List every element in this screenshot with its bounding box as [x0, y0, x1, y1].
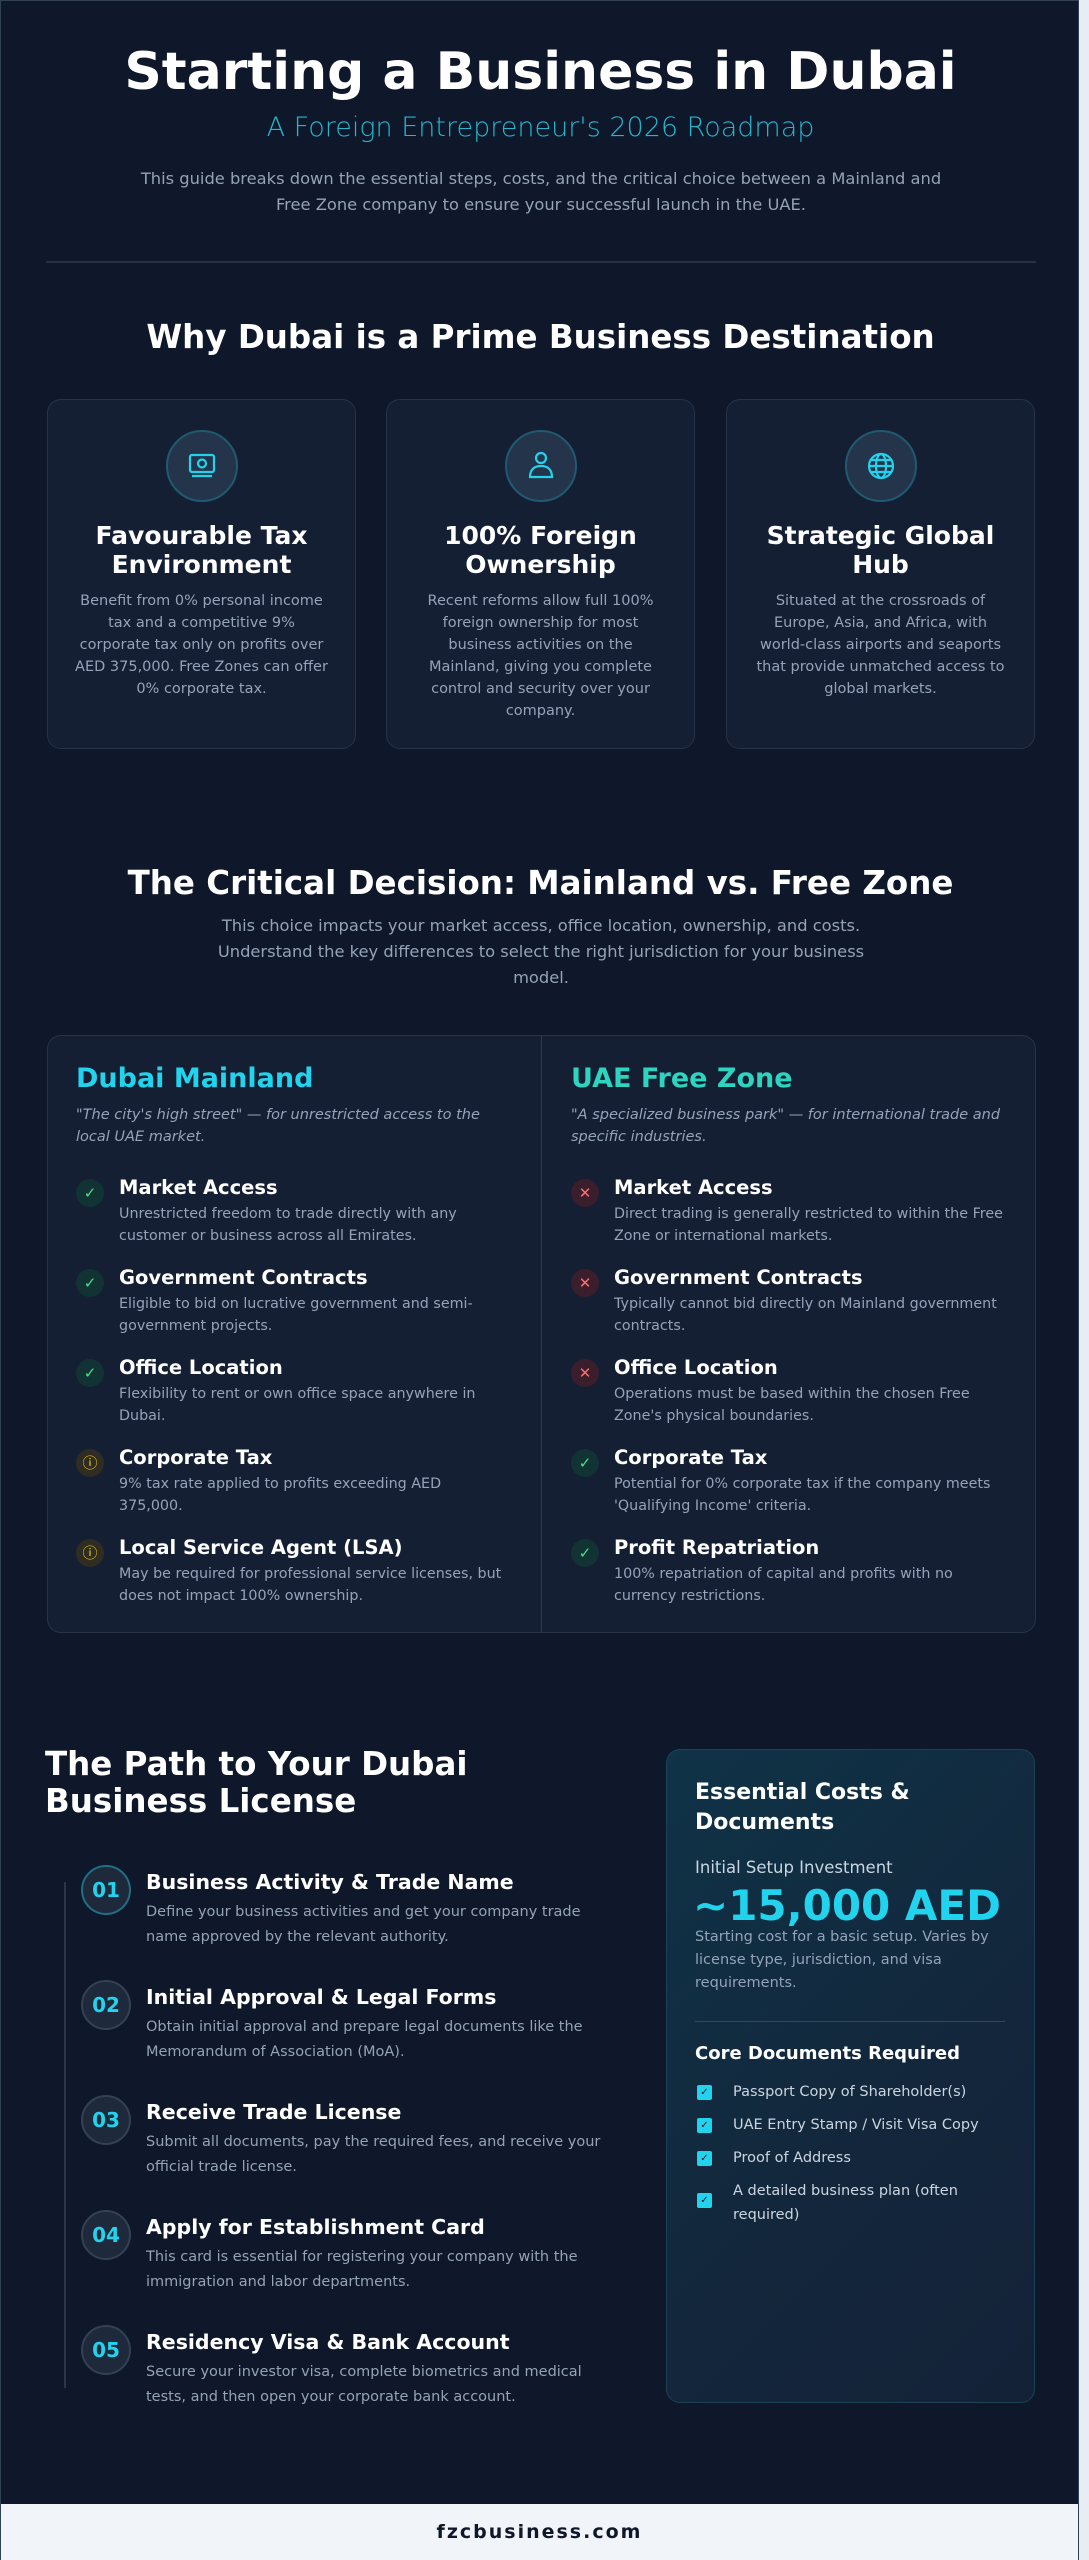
card title [96, 521, 308, 579]
item [571, 1446, 990, 1514]
doc list: ✓ [700, 2120, 709, 2131]
icon: globe [845, 430, 917, 502]
section intro: This choice impacts your market access, office location, ownership, and costs. Understand the key differences to select the right jurisdiction for your business model. [218, 916, 864, 987]
doc list: ✓ [700, 2195, 709, 2206]
column: mainland: ✓ [84, 1184, 96, 1202]
column: free zone: Operations must be based within the chosen Free Zone's physical boundaries. [614, 1386, 970, 1424]
card title: 100% Foreign [444, 521, 637, 550]
column: free zone: Government Contracts [614, 1266, 863, 1289]
card title: Favourable Tax [96, 521, 307, 550]
item [571, 1356, 970, 1424]
heading: path: The Path to Your Dubai [45, 1745, 468, 1783]
doc list: ✓ [700, 2087, 709, 2098]
item [571, 1176, 1003, 1244]
doc list: UAE Entry Stamp / Visit Visa Copy [733, 2117, 979, 2133]
text: Submit all documents, pay the required fees, and receive your official trade license. [146, 2134, 600, 2175]
text: Business Activity & Trade Name [146, 1870, 514, 1894]
column: free zone: ✓ [579, 1454, 591, 1472]
column: mainland: ✓ [84, 1364, 96, 1382]
doc list: Proof of Address [733, 2150, 851, 2166]
step 5: 05 [92, 2338, 120, 2362]
text: Receive Trade License [146, 2100, 401, 2124]
column: free zone: Profit Repatriation [614, 1536, 819, 1559]
card text: Recent reforms allow full 100% foreign ownership for most business activities on the Mainland, giving you complete control and security over your company. [428, 593, 653, 719]
column: mainland: 375,000. [119, 1498, 183, 1514]
card title [444, 521, 637, 579]
heading: path: Business License [45, 1782, 356, 1820]
column: mainland: May be required for professional service licenses, but does not impact 100% ownership. [119, 1566, 501, 1604]
doc list: ✓ [700, 2153, 709, 2164]
doc list: A detailed business plan (often required) [733, 2183, 958, 2223]
step 1 [81, 1865, 581, 1945]
title: Starting a Business in Dubai [124, 42, 957, 102]
step 4: 04 [92, 2223, 120, 2247]
footer [1, 2504, 1078, 2560]
icon: money [166, 430, 238, 502]
column: mainland: ⓘ [82, 1454, 98, 1472]
column: free zone [571, 1063, 1003, 1604]
step 5 [81, 2325, 582, 2405]
column: free zone: Typically cannot bid directly on Mainland government contracts. [614, 1296, 997, 1334]
item [571, 1266, 997, 1334]
column: mainland: Office Location [119, 1356, 283, 1379]
text: Apply for Establishment Card [146, 2215, 485, 2239]
heading: Dubai Mainland [76, 1063, 313, 1094]
item [76, 1266, 473, 1334]
docs heading: Core Documents Required [695, 2043, 960, 2064]
column: mainland: Flexibility to rent or own office space anywhere in Dubai. [119, 1386, 476, 1424]
step 2 [81, 1980, 583, 2060]
card title: Ownership [465, 550, 616, 579]
column: mainland: Eligible to bid on lucrative government and semi-government projects. [119, 1296, 473, 1334]
quote: "The city's high street" — for unrestricted access to the local UAE market. [76, 1107, 480, 1145]
text: Secure your investor visa, complete biometrics and medical tests, and then open your corporate bank account. [146, 2364, 582, 2405]
subtitle: A Foreign Entrepreneur's 2026 Roadmap [267, 112, 814, 143]
step 2: 02 [92, 1993, 120, 2017]
text: Initial Approval & Legal Forms [146, 1985, 496, 2009]
column: free zone: Office Location [614, 1356, 778, 1379]
column: mainland: Government Contracts [119, 1266, 368, 1289]
card: hub [726, 399, 1035, 749]
panel: costs [666, 1749, 1035, 2403]
quote: "A specialized business park" — for international trade and specific industries. [571, 1107, 1000, 1145]
step 3: 03 [92, 2108, 120, 2132]
card title: Hub [852, 550, 909, 579]
intro text: This guide breaks down the essential steps, costs, and the critical choice between a Mainland and Free Zone company to ensure your successful launch in the UAE. [141, 169, 941, 214]
panel heading [695, 1780, 910, 1835]
card: tax [47, 399, 356, 749]
cost note: Starting cost for a basic setup. Varies by license type, jurisdiction, and visa requirements. [695, 1929, 989, 1991]
item [76, 1536, 501, 1604]
card text: Benefit from 0% personal income tax and a competitive 9% corporate tax only on profits over AED 375,000. Free Zones can offer 0% corporate tax. [75, 593, 328, 697]
column: mainland: Unrestricted freedom to trade directly with any customer or business across all Emirates. [119, 1206, 457, 1244]
label: Initial Setup Investment [695, 1858, 893, 1877]
text: Obtain initial approval and prepare legal documents like the Memorandum of Association (MoA). [146, 2019, 583, 2060]
heading: why dubai: Why Dubai is a Prime Business Destination [146, 318, 935, 356]
item [76, 1446, 441, 1514]
text: Residency Visa & Bank Account [146, 2330, 510, 2354]
item [571, 1536, 953, 1604]
column: mainland: Local Service Agent (LSA) [119, 1536, 403, 1559]
card title: Environment [112, 550, 291, 579]
column: mainland: Corporate Tax [119, 1446, 272, 1469]
doc list [697, 2084, 979, 2223]
step 3 [81, 2095, 600, 2175]
card title: Strategic Global [767, 521, 994, 550]
step 4 [81, 2210, 578, 2290]
panel: comparison [47, 1035, 1036, 1633]
column: free zone: Potential for 0% corporate tax if the company meets 'Qualifying Income' criteria. [614, 1476, 990, 1514]
column: free zone: Market Access [614, 1176, 773, 1199]
column: free zone: Direct trading is generally restricted to within the Free Zone or international markets. [614, 1206, 1003, 1244]
card: ownership [386, 399, 695, 749]
column: mainland: ⓘ [82, 1544, 98, 1562]
column: free zone: ✕ [579, 1184, 591, 1202]
footer: fzcbusiness.com [437, 2521, 642, 2543]
column: mainland: ✓ [84, 1274, 96, 1292]
column: free zone: Corporate Tax [614, 1446, 767, 1469]
column: free zone: 100% repatriation of capital and profits with no currency restrictions. [614, 1566, 953, 1604]
big number: ~15,000 AED [693, 1881, 1001, 1930]
column: mainland: 9% tax rate applied to profits exceeding AED [119, 1476, 441, 1492]
doc list: Passport Copy of Shareholder(s) [733, 2084, 966, 2100]
step 1: 01 [92, 1878, 120, 1902]
column: free zone: ✓ [579, 1544, 591, 1562]
panel heading: Documents [695, 1810, 834, 1835]
column: free zone: ✕ [579, 1274, 591, 1292]
heading: critical decision: The Critical Decision: Mainland vs. Free Zone [128, 864, 953, 902]
heading: path [45, 1745, 468, 1820]
panel heading: Essential Costs & [695, 1780, 910, 1805]
card title [767, 521, 994, 579]
item [76, 1356, 476, 1424]
text: This card is essential for registering your company with the immigration and labor departments. [146, 2249, 578, 2290]
column: mainland [76, 1063, 501, 1604]
heading: UAE Free Zone [571, 1063, 793, 1094]
text: Define your business activities and get your company trade name approved by the relevant authority. [146, 1904, 581, 1945]
icon: person [505, 430, 577, 502]
column: mainland: Market Access [119, 1176, 278, 1199]
card text: Situated at the crossroads of Europe, Asia, and Africa, with world-class airports and seaports that provide unmatched access to global markets. [756, 593, 1005, 697]
item [76, 1176, 457, 1244]
column: free zone: ✕ [579, 1364, 591, 1382]
